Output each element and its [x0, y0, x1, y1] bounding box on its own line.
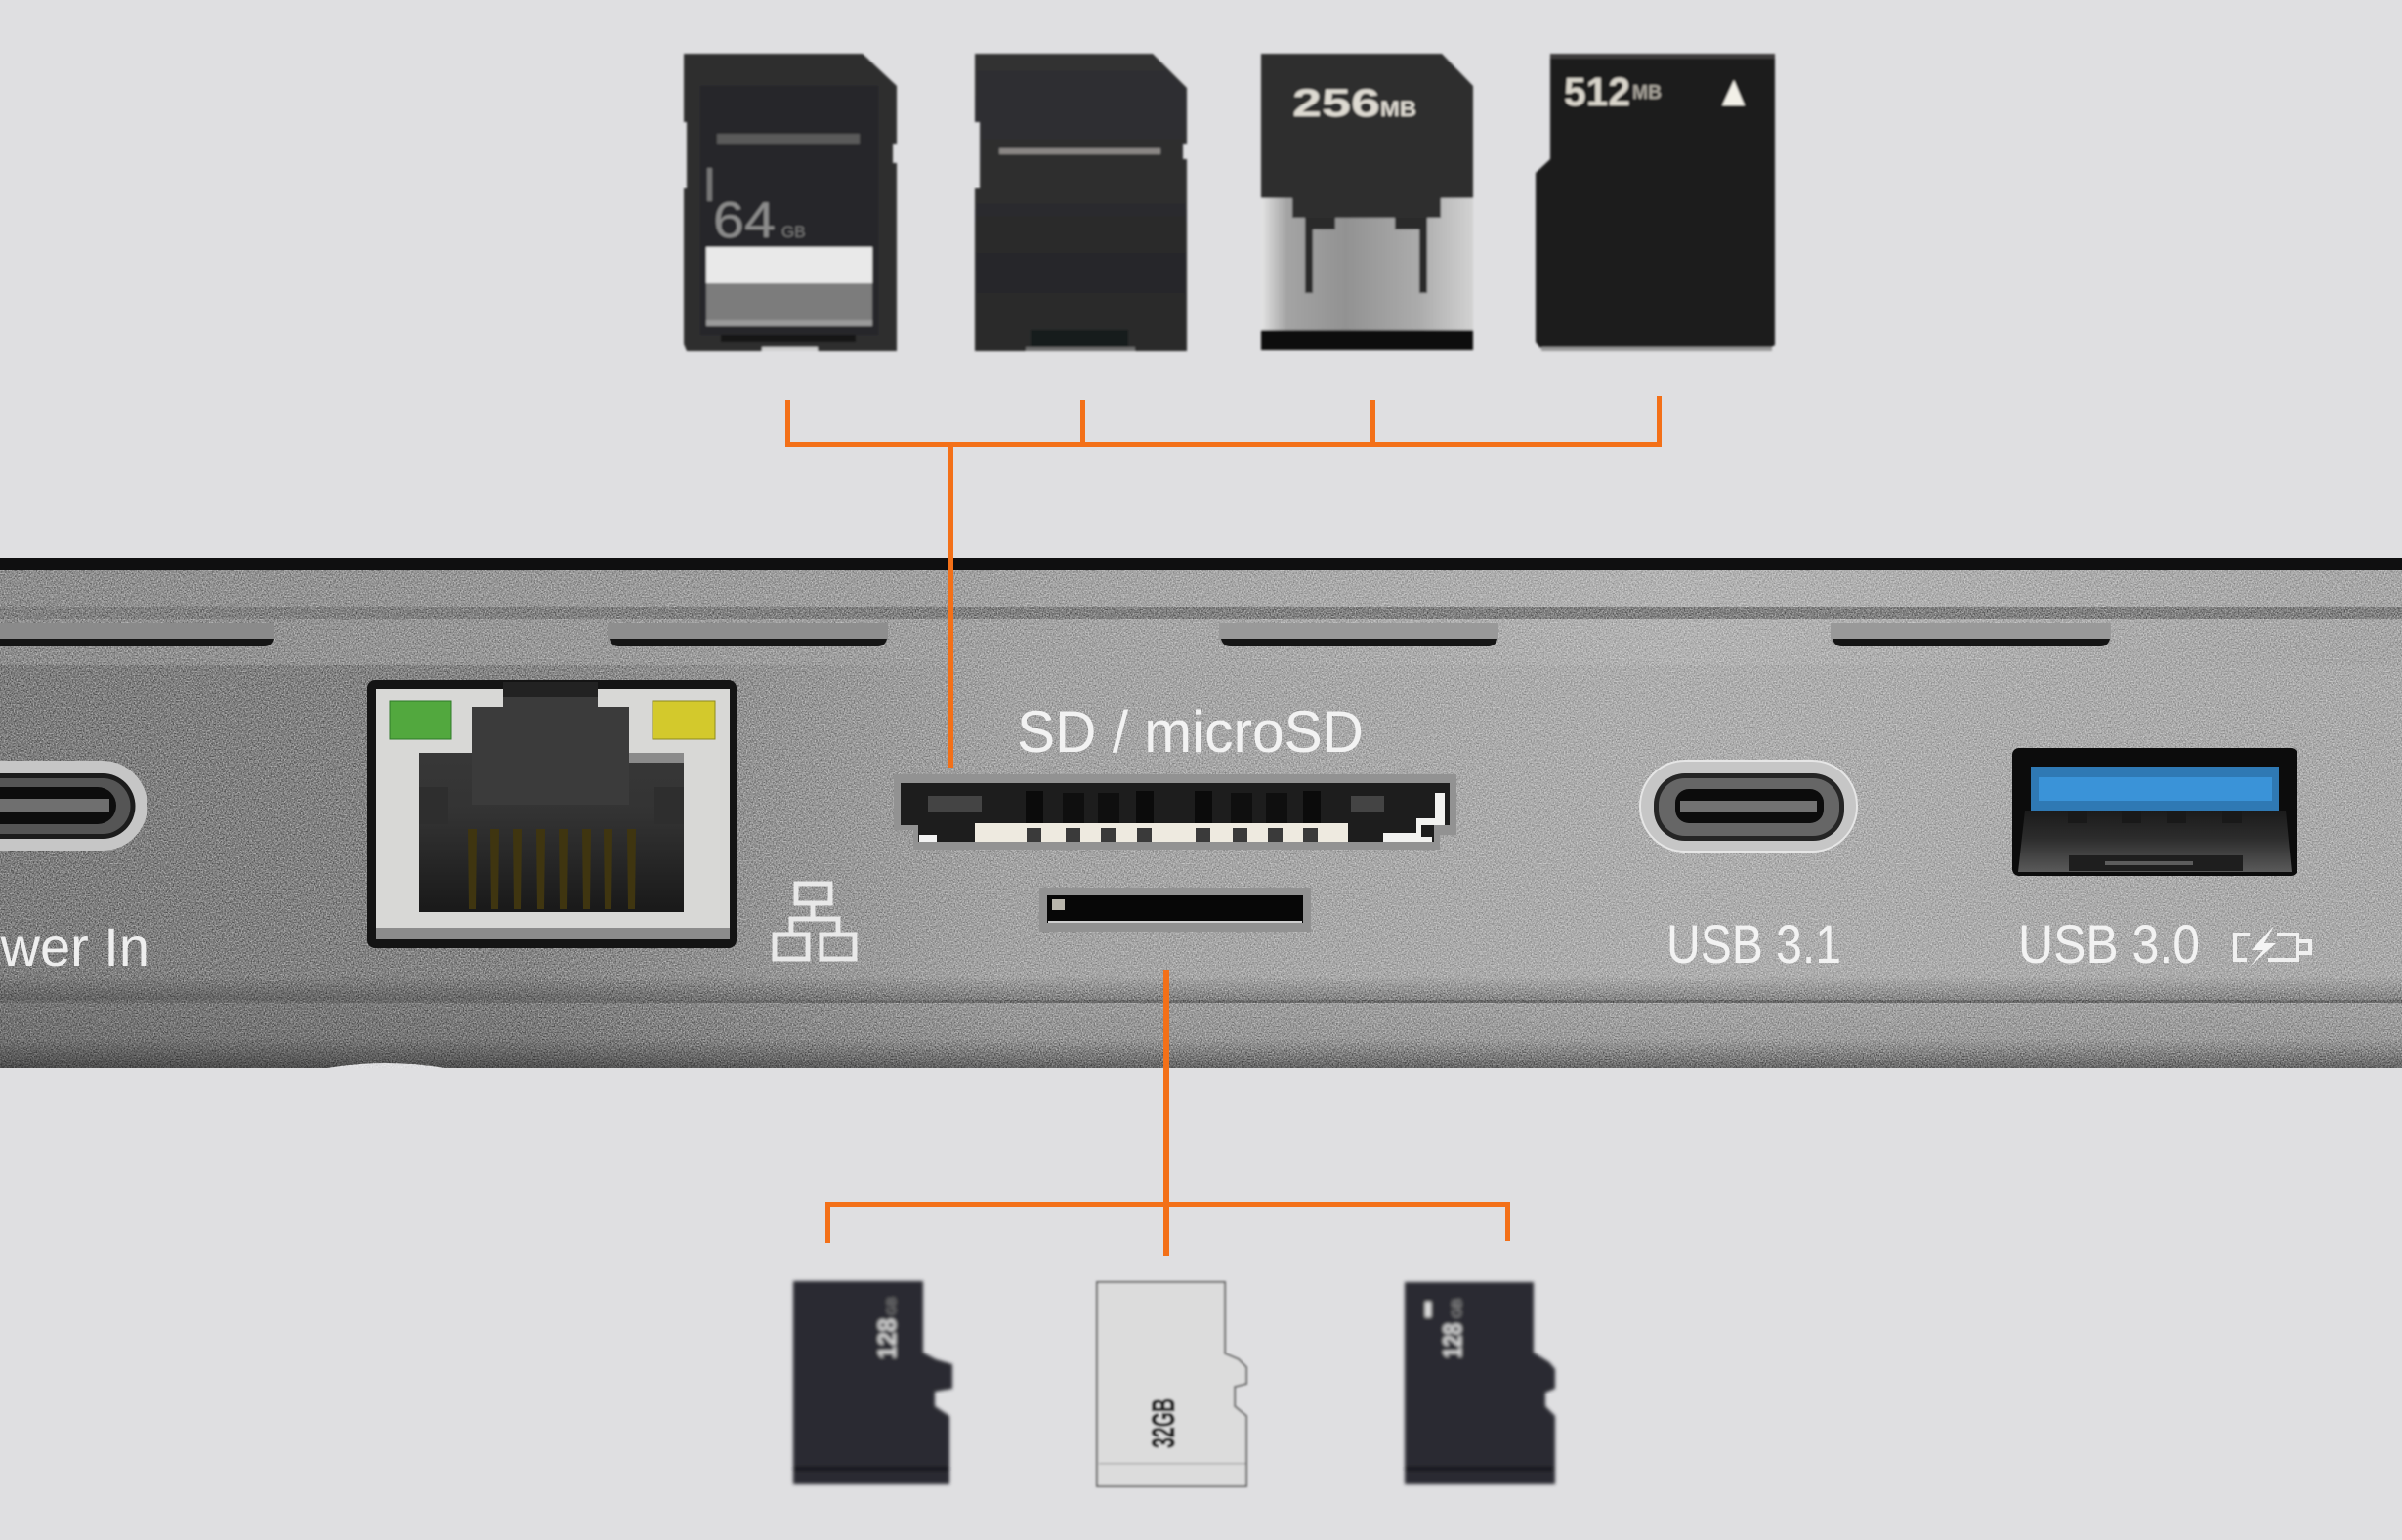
orange connector: to microSD cards: [1163, 970, 1169, 1256]
orange connector: to SD slot: [948, 444, 953, 768]
SD card: 256 MB metal: [1261, 54, 1473, 350]
icon: battery charging: [2235, 926, 2310, 967]
microSD card: 32 GB white: [1097, 1282, 1246, 1486]
USB-A port: USB 3.0: [2012, 748, 2297, 876]
SD card: 512 MB: MB: [1632, 82, 1662, 104]
SD card: 512 MB: 512: [1564, 69, 1630, 114]
microSD card: 128 GB left: 128: [872, 1318, 902, 1359]
RJ45 status LED: green: [390, 701, 451, 739]
label: USB 3.0: USB 3.0: [2018, 913, 2200, 975]
SD card slot: [894, 774, 1456, 850]
orange bracket: SD cards: [785, 396, 1662, 447]
icon: network: [775, 884, 855, 959]
SD card: blank back: [975, 54, 1187, 351]
SD card: 256 MB metal: 256: [1292, 82, 1380, 125]
dock body: [0, 558, 2402, 1068]
microSD card: 128 GB right: 128: [1438, 1323, 1467, 1358]
USB-C port: power in: [0, 761, 147, 851]
SD card: 64 GB: GB: [781, 223, 806, 241]
microSD card slot: [1039, 888, 1311, 932]
SD card: 256 MB metal: MB: [1380, 97, 1416, 121]
SD card: 64 GB: [684, 54, 897, 351]
label: USB 3.1: USB 3.1: [1666, 913, 1841, 975]
vent slots: [0, 623, 2111, 646]
orange bracket: microSD cards: [825, 1202, 1510, 1243]
microSD card: 128 GB right: GB: [1449, 1299, 1464, 1318]
RJ45 status LED: yellow: [653, 701, 715, 739]
microSD card: 128 GB right: [1405, 1282, 1555, 1484]
SD card: 512 MB: [1536, 54, 1775, 351]
microSD card: 128 GB left: GB: [884, 1297, 899, 1315]
RJ45 contact pins: [468, 829, 636, 909]
microSD card: 32 GB white: 32GB: [1146, 1398, 1181, 1448]
SD card: 64 GB: 64: [713, 192, 776, 249]
SD slot: white contact strip: [975, 823, 1348, 842]
RJ45 ethernet port: [367, 680, 737, 948]
microSD card: 128 GB left: [793, 1281, 952, 1484]
SD slot: white write-protect hook: [1383, 793, 1445, 842]
SD slot: contacts: [1027, 828, 1318, 842]
label: SD / microSD: SD / microSD: [1017, 699, 1364, 765]
USB-C port: USB 3.1: [1640, 761, 1857, 852]
